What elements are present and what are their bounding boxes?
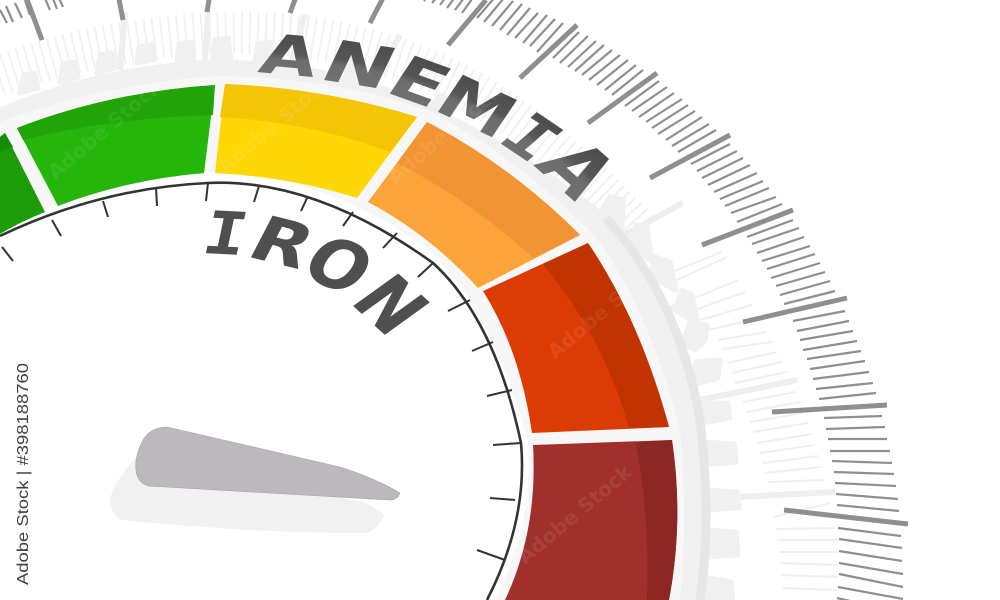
- stock watermarks: Adobe Stock: [513, 459, 637, 569]
- stock watermarks: Adobe Stock: [543, 254, 667, 364]
- needle: [136, 427, 400, 500]
- gear ring: [0, 38, 739, 600]
- label: ANEMIA: E: [375, 44, 463, 122]
- needle shadow: [110, 457, 385, 533]
- segment: red: [483, 243, 669, 433]
- label: IRON: [197, 199, 447, 350]
- label: ANEMIA: A: [517, 127, 637, 212]
- label: IRON: R: [237, 204, 327, 283]
- stock watermarks: Adobe Stock: [43, 74, 167, 184]
- label: IRON: I: [197, 199, 254, 269]
- ring band: [0, 76, 684, 600]
- inner tick ring: [0, 183, 522, 600]
- segment: orange: [368, 122, 580, 288]
- stock id side text: Adobe Stock | #398188760: [15, 363, 32, 585]
- colour scale: [0, 84, 677, 600]
- label: IRON: N: [334, 261, 447, 350]
- label: ANEMIA: [254, 23, 637, 212]
- inner dial face: [0, 172, 529, 600]
- stock watermarks: Adobe Stock: [383, 79, 507, 189]
- ring shadow strip: [606, 218, 706, 600]
- label: ANEMIA: I: [484, 100, 578, 175]
- label: IRON: O: [287, 220, 389, 311]
- segment: green: [17, 85, 215, 206]
- stock watermarks: Adobe Stock: [213, 69, 337, 179]
- label: ANEMIA: M: [424, 62, 530, 152]
- label: ANEMIA: N: [311, 28, 407, 102]
- stock watermarks: [43, 69, 667, 569]
- segment: dark red: [505, 440, 677, 600]
- label: ANEMIA: A: [254, 23, 325, 90]
- segment: dark green: [0, 133, 45, 234]
- major ticks: [25, 0, 908, 524]
- segment: yellow: [215, 84, 417, 198]
